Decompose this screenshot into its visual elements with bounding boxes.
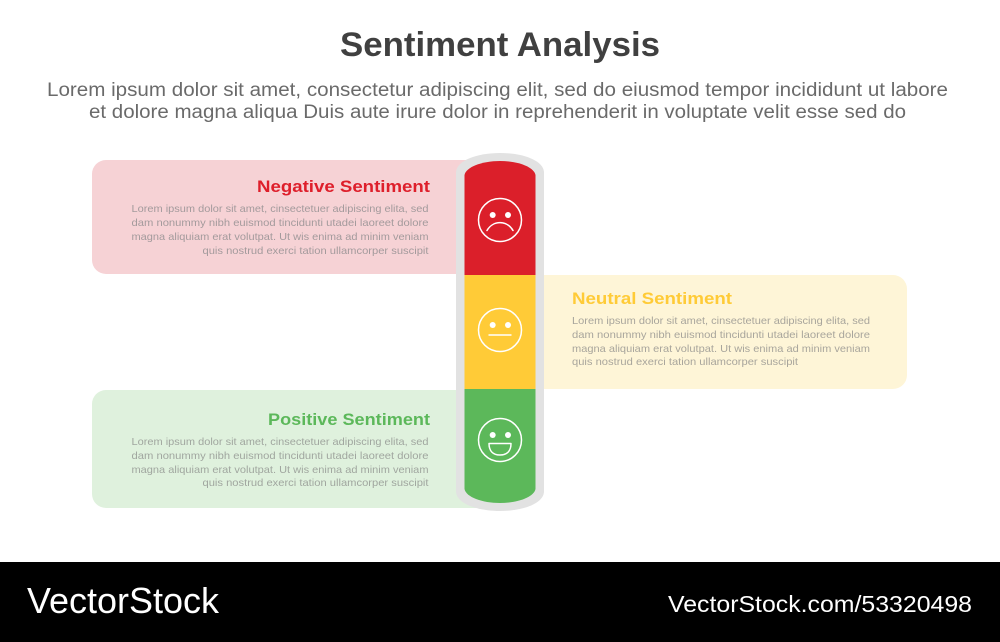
subtitle text block	[47, 80, 948, 123]
neutral panel background	[520, 275, 907, 389]
icon: neutral face	[478, 308, 522, 352]
capsule green segment	[464, 389, 536, 503]
panel: positive sentiment	[92, 390, 480, 508]
positive panel background	[92, 390, 480, 508]
negative panel background	[92, 160, 480, 274]
footer url text: VectorStock.com/53320498	[668, 591, 972, 617]
subtitle text block: Lorem ipsum dolor sit amet, consectetur adipiscing elit, sed do eiusmod tempor incididunt ut labore	[47, 80, 948, 101]
neutral body text: quis nostrud exerci tation ullamcorper suscipit	[572, 356, 798, 368]
positive heading: Positive Sentiment	[268, 410, 430, 429]
neutral body text: magna aliquiam erat volutpat. Ut wis enima ad minim veniam	[572, 343, 870, 355]
positive body text	[132, 436, 429, 489]
positive body text: magna aliquiam erat volutpat. Ut wis enima ad minim veniam	[132, 464, 429, 476]
footer bar	[0, 562, 1000, 642]
negative heading: Negative Sentiment	[257, 177, 430, 196]
title: Sentiment Analysis	[340, 26, 660, 64]
footer logo text: VectorStock	[27, 580, 220, 621]
neutral heading: Neutral Sentiment	[572, 289, 732, 308]
capsule yellow segment	[464, 275, 536, 389]
neutral body text: dam nonummy nibh euismod tincidunti utadei laoreet dolore	[572, 329, 870, 341]
subtitle text block: et dolore magna aliqua Duis aute irure dolor in reprehenderit in voluptate velit esse sed do	[89, 102, 906, 123]
neutral body text: Lorem ipsum dolor sit amet, cinsectetuer adipiscing elita, sed	[572, 315, 870, 327]
negative body text: magna aliquiam erat volutpat. Ut wis enima ad minim veniam	[132, 231, 429, 243]
positive body text: Lorem ipsum dolor sit amet, cinsectetuer adipiscing elita, sed	[132, 436, 429, 448]
sentiment capsule gauge	[456, 153, 544, 511]
panel: neutral sentiment	[520, 275, 907, 389]
capsule outer frame	[456, 153, 544, 511]
negative body text: quis nostrud exerci tation ullamcorper suscipit	[202, 245, 429, 257]
panel: negative sentiment	[92, 160, 480, 274]
negative body text	[132, 203, 429, 257]
neutral body text	[572, 315, 870, 368]
positive body text: quis nostrud exerci tation ullamcorper suscipit	[202, 477, 429, 489]
positive body text: dam nonummy nibh euismod tincidunti utadei laoreet dolore	[132, 450, 429, 462]
footer background	[0, 562, 1000, 642]
icon: sad face	[478, 198, 522, 242]
icon: happy face	[478, 418, 522, 462]
negative body text: Lorem ipsum dolor sit amet, cinsectetuer adipiscing elita, sed	[132, 203, 429, 215]
negative body text: dam nonummy nibh euismod tincidunti utadei laoreet dolore	[132, 217, 429, 229]
capsule red segment	[464, 161, 536, 275]
